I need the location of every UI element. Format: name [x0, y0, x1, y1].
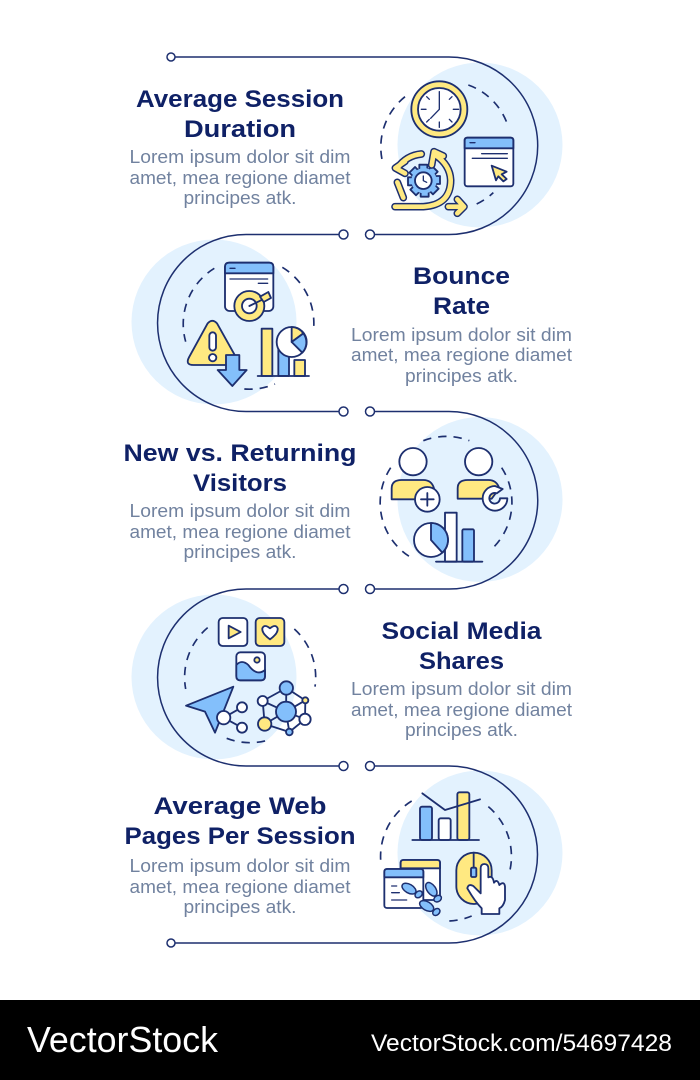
background circle [398, 62, 562, 228]
start node [167, 53, 175, 61]
heading: Pages Per Session [124, 823, 356, 850]
connector arc [374, 412, 538, 589]
body text: Lorem ipsum dolor sit dim [130, 501, 350, 521]
heading: Visitors [193, 470, 287, 497]
connector arc [158, 234, 339, 412]
end node [366, 230, 374, 239]
body text: Lorem ipsum dolor sit dim [351, 325, 572, 345]
icon: users and charts [380, 436, 512, 562]
body text: amet, mea regione diamet [130, 168, 350, 188]
body text: amet, mea regione diamet [130, 522, 350, 542]
background circle [398, 770, 562, 936]
body text: Lorem ipsum dolor sit dim [130, 147, 350, 167]
start node [339, 584, 348, 594]
body text: principes atk. [405, 720, 518, 740]
connector arc [158, 589, 339, 766]
end node [167, 939, 175, 947]
end node [339, 762, 348, 770]
panel: new vs returning visitors [124, 407, 562, 594]
start node [366, 407, 374, 416]
icon: media tiles, paper plane and network [185, 618, 316, 743]
body text: principes atk. [184, 542, 296, 562]
body text: amet, mea regione diamet [351, 345, 572, 365]
start node [339, 230, 348, 239]
end node [339, 407, 348, 416]
background circle [132, 594, 296, 760]
background circle [132, 240, 296, 404]
body text: Lorem ipsum dolor sit dim [351, 679, 572, 699]
heading: Average Session [136, 86, 344, 113]
brand logo text: VectorStock [27, 1019, 219, 1060]
heading: New vs. Returning [124, 440, 356, 467]
heading: Duration [184, 116, 296, 143]
body text: amet, mea regione diamet [130, 877, 350, 897]
icon: bars, footprints and mouse [381, 792, 511, 921]
body text: principes atk. [405, 366, 518, 386]
body text: principes atk. [184, 897, 296, 917]
connector arc [175, 57, 538, 234]
end node [366, 584, 374, 594]
heading: Average Web [154, 793, 326, 820]
connector arc [175, 766, 538, 943]
image id text: VectorStock.com/54697428 [371, 1030, 672, 1057]
body text: principes atk. [184, 188, 296, 208]
heading: Shares [419, 648, 504, 675]
body text: Lorem ipsum dolor sit dim [130, 856, 350, 876]
panel: average web pages per session [124, 762, 562, 947]
body text: amet, mea regione diamet [351, 700, 572, 720]
start node [366, 762, 374, 770]
icon: clock, gear cycle and browser window [381, 81, 513, 213]
footer bar [0, 1000, 700, 1080]
panel: average session duration [130, 53, 562, 239]
heading: Social Media [382, 618, 542, 645]
icon: window target, warning and charts [183, 263, 314, 389]
background circle [398, 417, 562, 582]
heading: Rate [433, 293, 490, 320]
heading: Bounce [413, 263, 510, 290]
panel: social media shares [132, 584, 572, 770]
panel: bounce rate [132, 230, 572, 416]
